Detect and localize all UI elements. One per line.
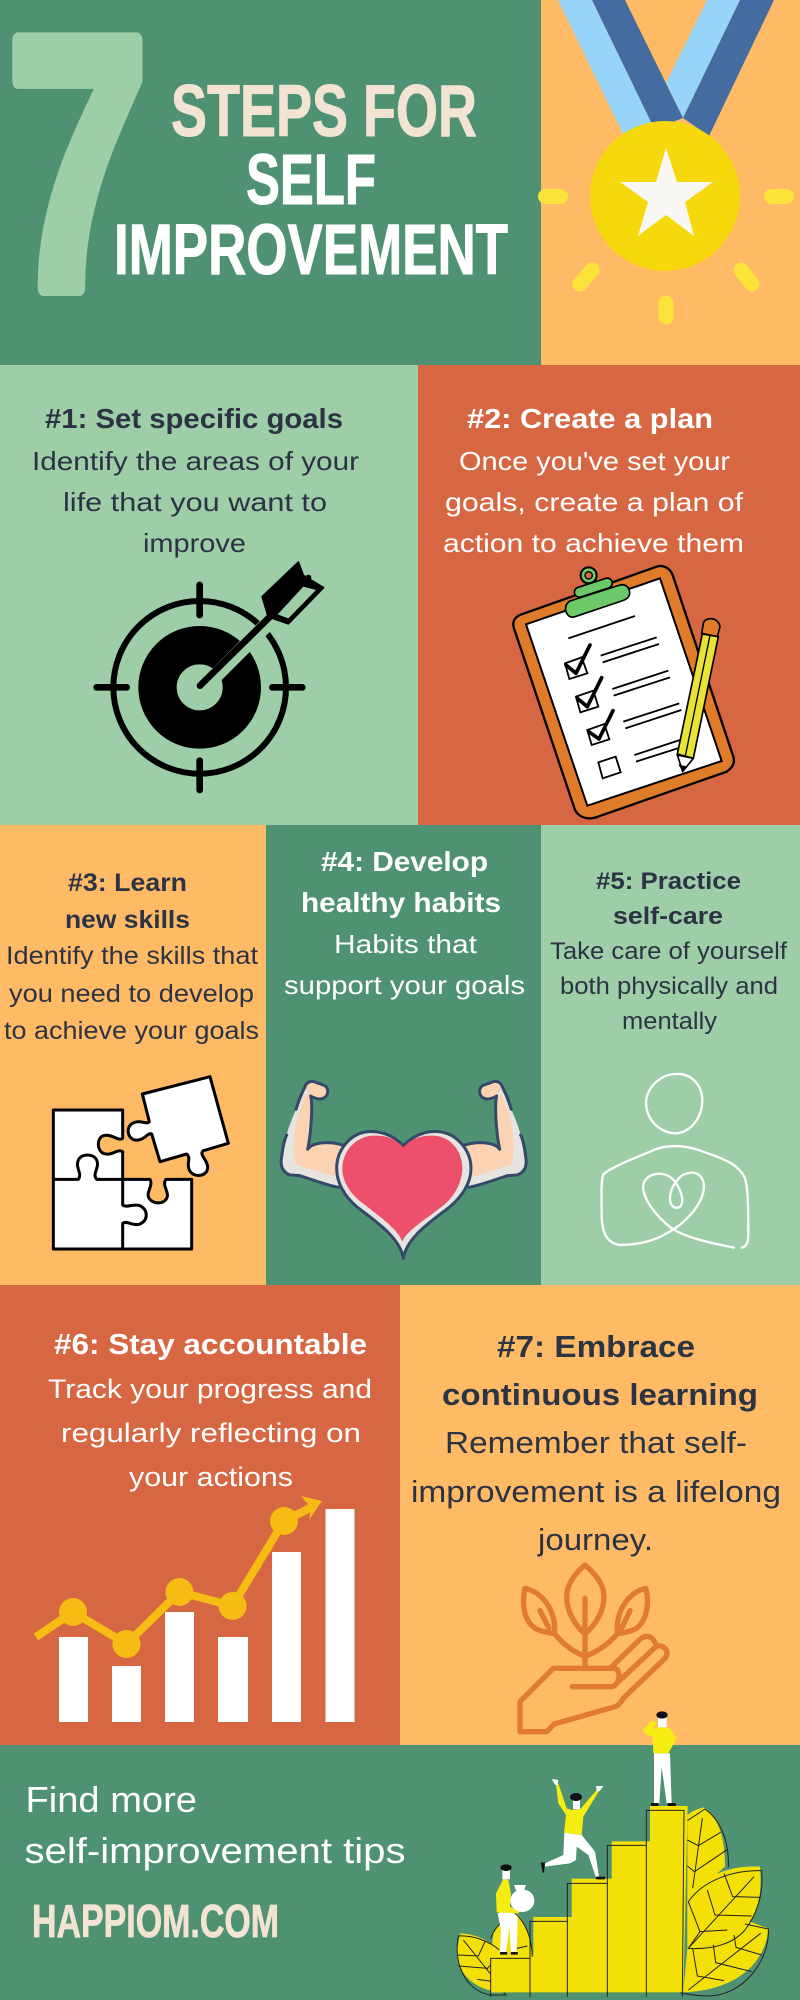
text: step 6 description: your actions [129,1462,293,1492]
text: step 6 description: regularly reflecting on [61,1418,361,1448]
heading: step 2: #2: Create a plan [467,403,713,434]
title: SELF [246,141,376,220]
leaves [457,1807,768,1996]
text: step 1 description: Identify the areas of your [32,446,359,476]
heading: step 3 [65,869,190,934]
title: STEPS FOR [171,71,477,152]
text: call to action: Find more [26,1779,197,1820]
text: step 5 description: mentally [622,1008,717,1035]
text: step 2 description: goals, create a plan of [445,487,744,517]
panel: header title [0,0,541,365]
text: step 5 description: Take care of yourself [550,938,787,965]
icon: self-care line figure [601,1074,748,1248]
text: step 5 description: both physically and [560,973,778,1000]
heading: step 1: #1: Set specific goals [45,403,343,434]
trend line with arrow [36,1496,322,1658]
text: step 2 description: action to achieve them [443,528,744,558]
icon: puzzle pieces [53,1077,228,1249]
text: call to action: self-improvement tips [24,1830,406,1871]
heading: step 6: #6: Stay accountable [54,1329,367,1361]
heading: step 4 [301,846,501,918]
staircase [491,1806,688,1997]
illustration: climbing stairs [457,1711,768,1997]
icon: sun rays [546,196,786,317]
heading: step 3: new skills [65,906,190,934]
panel: medal [541,0,800,365]
text: step 3 description: you need to develop [9,980,254,1008]
heading: step 4: #4: Develop [321,846,488,877]
panel: step 5 [541,825,800,1285]
text: step 2 description [443,446,744,558]
panel: step 1 [0,365,418,825]
text: step 7 description [411,1425,781,1557]
panel: step 4 [266,825,541,1285]
text: step 6 description [48,1374,372,1492]
text: step 5 description [550,938,787,1035]
heading: step 4: healthy habits [301,887,501,918]
title [114,71,508,290]
panel: step 3 [0,825,266,1285]
person carrying bag [496,1864,534,1955]
panel: step 6 [0,1285,400,1745]
text: step 3 description: to achieve your goals [4,1017,259,1045]
icon: target with arrow [97,562,323,790]
panel: footer [0,1711,800,2000]
text: step 1 description: life that you want to [63,487,327,517]
text: step 4 description: Habits that [334,929,478,959]
text: step 1 description [32,446,359,558]
heading: step 3: #3: Learn [68,869,187,897]
person on top step [643,1711,677,1806]
text: step 7 description: journey. [537,1522,653,1557]
bar chart [36,1496,354,1722]
heading: step 5: #5: Practice [596,868,741,895]
icon: gold medal with star [590,121,740,271]
text: step 2 description: Once you've set your [459,446,730,476]
text: step 6 description: Track your progress and [48,1374,372,1404]
person jumping [541,1779,605,1879]
heading: step 7: continuous learning [442,1377,758,1412]
heading: step 5 [596,868,741,930]
website: HAPPIOM.COM [32,1895,279,1947]
text: step 4 description [284,929,525,1000]
heading: step 7: #7: Embrace [497,1329,695,1364]
panel: step 2 [418,365,800,825]
text: step 3 description [4,942,259,1045]
title: IMPROVEMENT [114,211,508,290]
text: call to action [24,1779,406,1871]
panel: step 7 [400,1285,800,1745]
heading: step 7 [442,1329,758,1412]
text: step 7 description: improvement is a lifelong [411,1474,781,1509]
icon: flexing heart [281,1081,526,1258]
text: step 3 description: Identify the skills that [6,942,258,970]
heading: step 5: self-care [613,903,723,930]
text: step 4 description: support your goals [284,970,525,1000]
icon: clipboard checklist with pencil [513,566,734,818]
icon: ribbon [558,0,774,136]
text: step 1 description: improve [143,528,246,558]
text: step 7 description: Remember that self- [445,1425,747,1460]
icon: hand holding plant [520,1565,667,1732]
